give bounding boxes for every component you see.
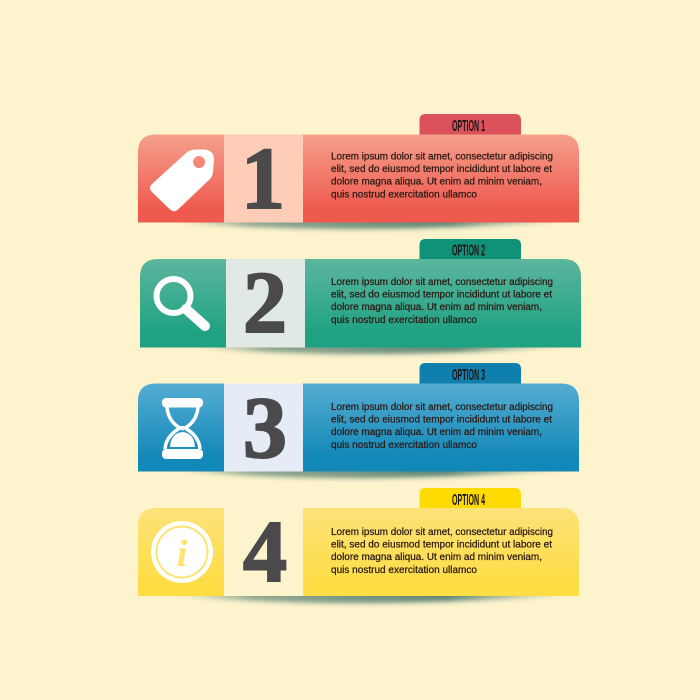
card body 4 — [138, 508, 579, 596]
text block 3 — [331, 402, 553, 451]
text block 1 — [331, 152, 553, 200]
tab: option 1 — [420, 114, 521, 135]
panel: option 4 — [138, 488, 579, 603]
number tile 2: 2 — [243, 255, 287, 352]
text block 4: Lorem ipsum dolor sit amet, consectetur adipiscing — [331, 527, 553, 538]
number tile 1 — [224, 131, 303, 228]
text block 2: dolore magna aliqua. Ut enim ad minim veniam, — [331, 302, 542, 313]
icon: hourglass — [162, 398, 203, 459]
icon: info circle: i — [177, 533, 188, 575]
text block 4: quis nostrud exercitation ullamco — [331, 565, 477, 576]
card body 2 — [140, 259, 581, 348]
number tile 3: 3 — [243, 380, 287, 477]
text block 2: elit, sed do eiusmod tempor incididunt ut labore et — [331, 290, 552, 300]
text block 3: elit, sed do eiusmod tempor incididunt ut labore et — [331, 414, 552, 426]
text block 1: elit, sed do eiusmod tempor incididunt ut labore et — [331, 164, 552, 175]
card shadow 3 — [175, 465, 565, 478]
number tile 2 — [226, 255, 305, 352]
card body 1 — [138, 134, 579, 222]
number tile 1: 1 — [241, 131, 285, 228]
number tile 4: 4 — [243, 504, 287, 601]
text block 1: Lorem ipsum dolor sit amet, consectetur adipiscing — [331, 152, 553, 162]
tab: option 4 — [420, 488, 521, 509]
text block 2: quis nostrud exercitation ullamco — [331, 315, 477, 326]
panel: option 2 — [140, 239, 581, 354]
number tile 3 — [224, 380, 303, 477]
text block 2 — [331, 277, 553, 326]
icon: info circle — [151, 521, 213, 583]
text block 4 — [331, 527, 553, 576]
tab: option 3: OPTION 3 — [452, 367, 485, 384]
text block 1: quis nostrud exercitation ullamco — [331, 190, 477, 200]
panel: option 3 — [138, 363, 579, 478]
card shadow 2 — [190, 341, 570, 354]
tab: option 2: OPTION 2 — [452, 242, 485, 260]
tab: option 2 — [420, 239, 521, 260]
text block 3: quis nostrud exercitation ullamco — [331, 440, 477, 451]
text block 4: dolore magna aliqua. Ut enim ad minim veniam, — [331, 552, 542, 563]
tab: option 4: OPTION 4 — [452, 492, 485, 509]
tab: option 1: OPTION 1 — [452, 118, 485, 135]
text block 2: Lorem ipsum dolor sit amet, consectetur adipiscing — [331, 277, 553, 288]
text block 4: elit, sed do eiusmod tempor incididunt ut labore et — [331, 540, 552, 550]
text block 3: dolore magna aliqua. Ut enim ad minim veniam, — [331, 427, 542, 438]
text block 3: Lorem ipsum dolor sit amet, consectetur adipiscing — [331, 402, 553, 413]
card body 3 — [138, 384, 579, 472]
number tile 4 — [224, 504, 303, 601]
icon: magnifying glass — [156, 279, 205, 326]
text block 1: dolore magna aliqua. Ut enim ad minim veniam, — [331, 176, 542, 188]
tab: option 3 — [420, 363, 521, 384]
card shadow 4 — [175, 590, 565, 603]
icon: price tag — [150, 150, 214, 211]
panel: option 1 — [138, 114, 579, 229]
card shadow 1 — [175, 216, 565, 229]
